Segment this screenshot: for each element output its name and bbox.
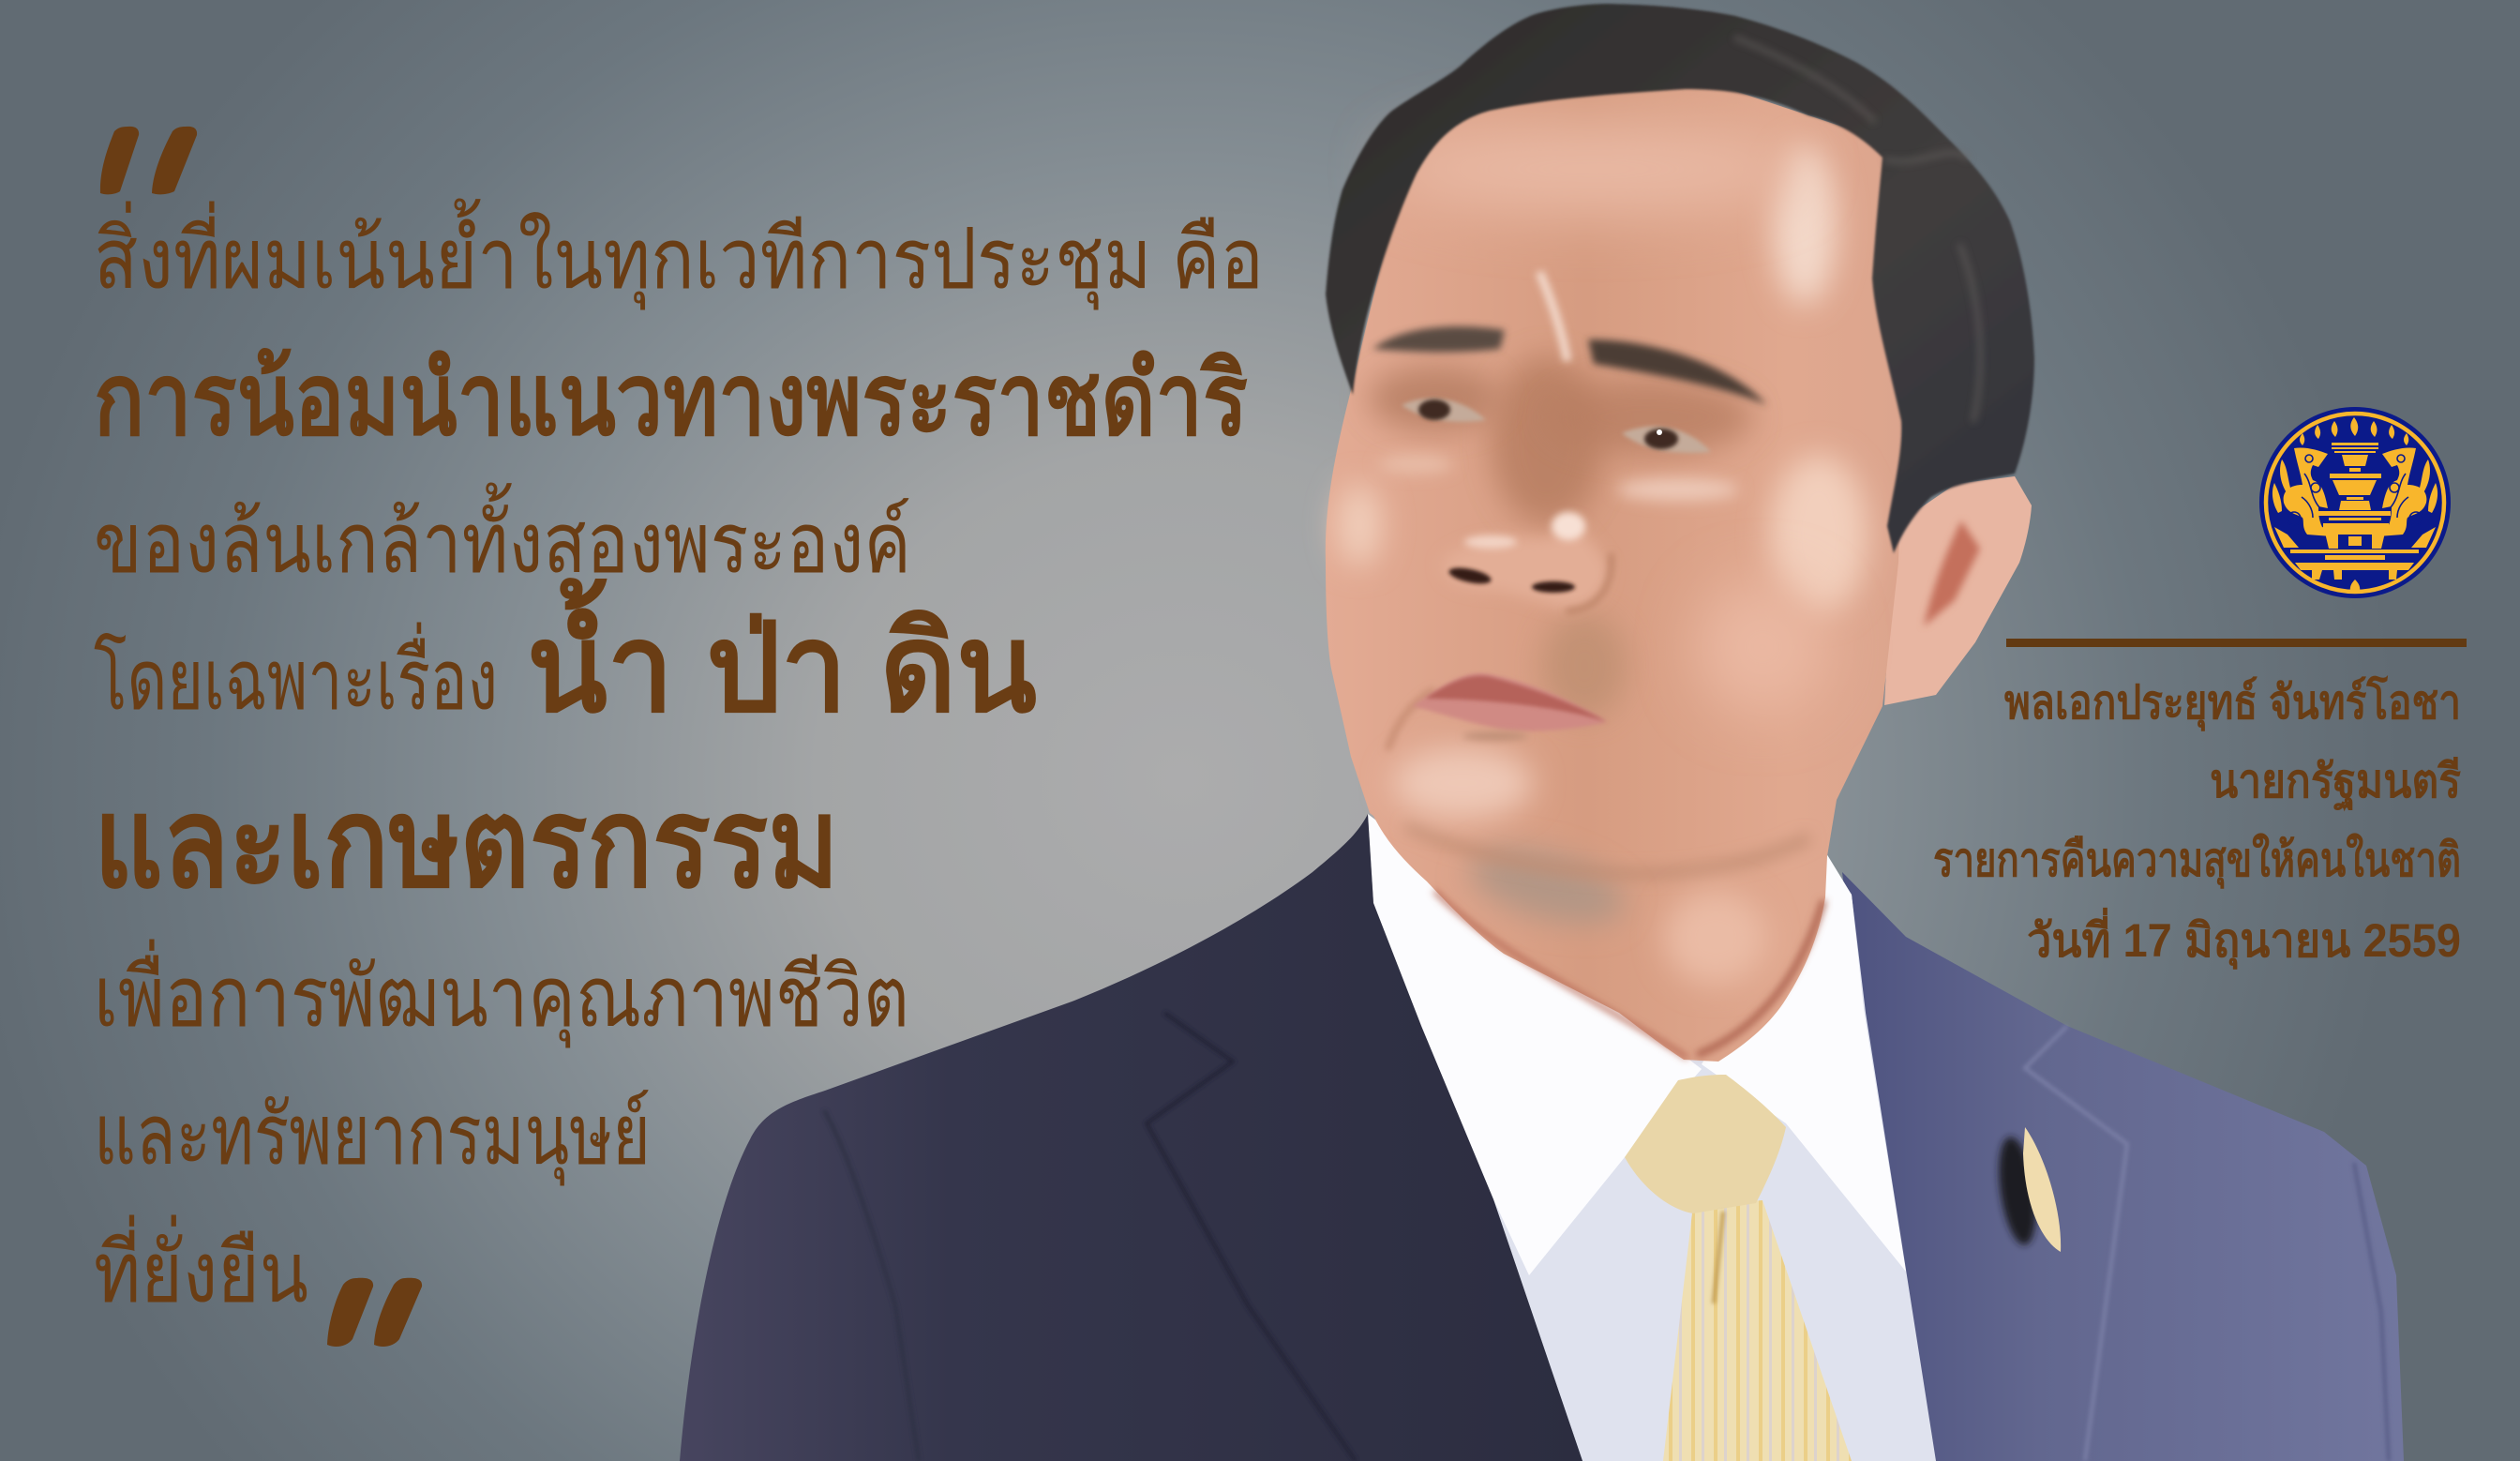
seal: tiers and base [2290, 550, 2419, 580]
quote line 2: การน้อมนำแนวทางพระราชดำริ [94, 342, 1248, 456]
government seal emblem [2259, 407, 2451, 598]
seal: lower bowl [2330, 474, 2381, 510]
quote line 3: ของล้นเกล้าทั้งสองพระองค์ [94, 483, 911, 591]
suit jacket: right side [1842, 872, 2404, 1461]
forehead highlights [1773, 145, 1837, 305]
frown lines [1539, 272, 1568, 361]
eyebrows [1372, 326, 1505, 352]
face and neck [1326, 75, 1903, 1062]
quote line 5: และเกษตรกรรม [94, 774, 839, 913]
necktie [1625, 1075, 1852, 1461]
under-eye bags [1617, 478, 1739, 501]
eyes [1402, 399, 1486, 422]
main quote text [94, 199, 1264, 1320]
seal: flames [2300, 417, 2408, 445]
lapel pin [1993, 1127, 2061, 1252]
seal: upper bowl [2332, 443, 2378, 472]
divider rule [2006, 639, 2467, 647]
shirt [1368, 819, 1936, 1461]
broadcast date: วันที่ 17 มิถุนายน 2559 [2027, 908, 2461, 970]
quote line 8: ที่ยั่งยืน [94, 1214, 308, 1320]
neck shading [1462, 835, 1632, 938]
nose [1441, 520, 1609, 610]
mouth [1412, 673, 1607, 731]
suit jacket: left side [680, 814, 1582, 1461]
portrait illustration [680, 4, 2404, 1461]
speaker title: นายกรัฐมนตรี [2210, 755, 2461, 811]
seal: table [2318, 511, 2391, 549]
quote line 1: สิ่งที่ผมเน้นย้ำในทุกเวทีการประชุม คือ [94, 199, 1264, 310]
closing quotation mark [327, 1278, 422, 1347]
opening quotation mark [100, 127, 197, 194]
attribution text [1933, 674, 2461, 970]
seal: left lion [2272, 447, 2332, 548]
quote line 4: โดยเฉพาะเรื่อง [94, 622, 498, 728]
quote line 7: และทรัพยากรมนุษย์ [94, 1089, 651, 1186]
brown upper-face shading [1491, 356, 1603, 525]
cheek highlights [1770, 455, 1868, 614]
seal: right lion [2378, 447, 2438, 548]
quote line 6: เพื่อการพัฒนาคุณภาพชีวิต [94, 939, 909, 1048]
nasolabial fold [1388, 689, 1434, 750]
shirt collar [1368, 814, 1906, 1275]
hair [1326, 4, 2034, 553]
quote line 4 emphasis: น้ำ ป่า ดิน [527, 577, 1037, 737]
nose shadow [1542, 614, 1627, 717]
ear [1884, 476, 2032, 705]
